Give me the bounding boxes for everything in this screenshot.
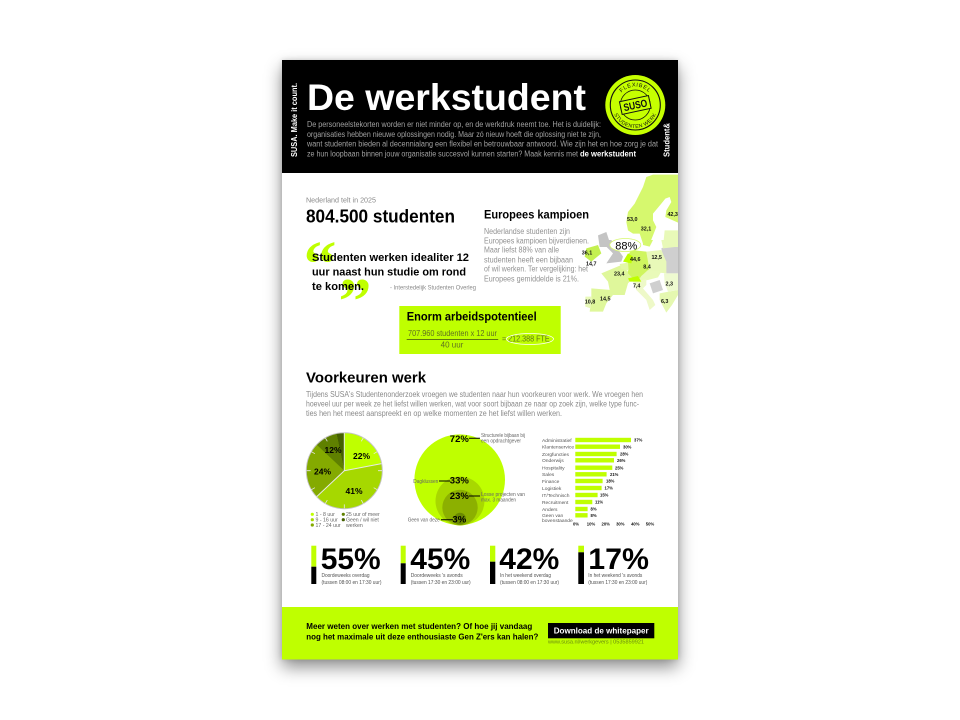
map values: 36,1 xyxy=(582,250,592,256)
panel heading: Enorm arbeidspotentieel xyxy=(407,311,537,324)
bar chart: Finance xyxy=(542,479,560,485)
stat: 55%: 55% xyxy=(321,543,381,576)
pie chart: 41% xyxy=(346,486,363,496)
venn chart: Dagklussen xyxy=(413,479,438,485)
stat: 42%: (tussen 08:00 en 17:30 uur) xyxy=(500,580,559,586)
header intro text: de werkstudent xyxy=(580,150,636,158)
map values: 42,3 xyxy=(667,212,678,218)
venn chart xyxy=(408,433,525,526)
venn chart: 33% xyxy=(450,475,469,486)
map values: 10,8 xyxy=(585,299,595,305)
formula: 40 uur xyxy=(441,341,464,350)
header intro text: ze hun loopbaan binnen jouw organisatie succesvol kunnen starten? Maak kennis met xyxy=(307,150,579,158)
bar chart: Administratief xyxy=(542,438,572,444)
venn chart: 3% xyxy=(452,515,467,526)
formula: 707.960 studenten x 12 uur xyxy=(408,329,497,338)
map values xyxy=(582,212,678,305)
quote text: te komen. xyxy=(312,281,364,293)
icon: stamp: FLEXIBEL xyxy=(619,82,650,92)
map values: 53,0 xyxy=(627,217,638,223)
stat: 55%: Doordeweeks overdag xyxy=(322,573,370,579)
venn chart: 23% xyxy=(450,491,469,502)
bar chart: 30% xyxy=(623,444,632,449)
header intro text: De personeelstekorten worden er niet minder op, en de werkdruk neemt toe. Het is duidelijk: xyxy=(307,120,601,129)
panel: Enorm arbeidspotentieel xyxy=(399,306,561,354)
section paragraph: ties hen het meest aanspreekt en op welke momenten ze het liefst willen werken. xyxy=(306,409,562,418)
section paragraph: hoeveel uur per week ze het liefst willen werken, wat voor soort bijbaan ze naar op zoek zijn, welke type func- xyxy=(306,400,639,408)
map values: 88% xyxy=(615,240,638,252)
bar chart xyxy=(542,438,654,526)
pie legend: 1 - 8 uur xyxy=(316,512,335,518)
bar chart: 11% xyxy=(595,500,603,505)
map values: 2,3 xyxy=(666,282,673,288)
map of Europe xyxy=(585,175,678,313)
vertical brand: Student& xyxy=(662,123,672,157)
stat: 17% xyxy=(578,543,649,586)
pie legend: werken xyxy=(346,523,363,529)
pie legend: 17 - 24 uur xyxy=(316,523,341,529)
bar chart: 40% xyxy=(631,522,640,526)
panel: Voorkeuren werk xyxy=(306,371,643,418)
vertical slogan: SUSA. Make it count. xyxy=(290,83,299,157)
bar chart: bovenstaande xyxy=(542,518,573,524)
stat: 55% xyxy=(311,543,382,586)
venn chart: een opdrachtgever xyxy=(481,438,521,444)
icon: stamp: STUDENTEN WERK xyxy=(614,113,656,128)
map values: 23,4 xyxy=(614,272,625,278)
call to action text: Meer weten over werken met studenten? Of hoe jij vandaag xyxy=(306,622,532,631)
stat: 42%: 42% xyxy=(499,543,559,576)
bar chart: IT/Technisch xyxy=(542,493,570,499)
stat: 17%: In het weekend 's avonds xyxy=(588,573,643,579)
quote text: uur naast hun studie om rond xyxy=(312,266,466,278)
bar chart: Klantenservice xyxy=(542,445,574,451)
map values: 44,6 xyxy=(630,257,641,263)
venn chart: 72% xyxy=(450,434,469,445)
stat: 55%: (tussen 08:00 en 17:30 uur) xyxy=(322,580,382,586)
panel: students count xyxy=(306,196,455,227)
download button: Download de whitepaper xyxy=(554,625,649,635)
bar chart: Hospitality xyxy=(542,466,565,472)
bar chart: 17% xyxy=(604,486,613,491)
stat: 45%: (tussen 17:30 en 23:00 uur) xyxy=(411,580,471,586)
section paragraph xyxy=(306,390,643,418)
panel: Europees kampioen text xyxy=(484,208,589,283)
stat: 45%: 45% xyxy=(410,543,470,576)
stat: 17%: (tussen 17:30 en 23:00 uur) xyxy=(588,580,647,586)
stat: 45%: Doordeweeks 's avonds xyxy=(411,573,463,579)
panel: call to action xyxy=(282,607,678,660)
pie chart: 22% xyxy=(353,451,370,461)
poster background xyxy=(282,60,678,659)
map values: 8,4 xyxy=(643,264,651,270)
paragraph: Europees gemiddelde is 21%. xyxy=(484,274,579,283)
icon: opening quote mark: “ xyxy=(304,228,336,301)
header intro text xyxy=(306,120,659,158)
download button xyxy=(548,623,654,638)
bar chart: 20% xyxy=(602,522,610,526)
call to action text xyxy=(306,622,538,641)
panel: header xyxy=(282,60,678,173)
bar chart: Logistiek xyxy=(542,486,562,492)
bar chart: 10% xyxy=(587,522,595,526)
formula xyxy=(407,329,550,350)
quote text xyxy=(312,252,469,293)
venn chart: Geen van deze xyxy=(408,518,440,524)
pie legend: Geen / wil niet xyxy=(346,518,379,524)
stat: 45% xyxy=(401,543,471,586)
bar chart: Anders xyxy=(542,507,558,513)
venn chart: Structurele bijbaan bij xyxy=(481,433,525,439)
quote text: Studenten werken idealiter 12 xyxy=(312,252,469,264)
stat: 42% xyxy=(490,543,559,586)
stat: 42%: In het weekend overdag xyxy=(500,573,551,579)
pie legend: 9 - 16 uur xyxy=(316,518,338,524)
bar chart: 26% xyxy=(617,458,626,463)
bar chart: Geen van xyxy=(542,513,563,519)
map values: 6,3 xyxy=(661,299,668,305)
bar chart: 8% xyxy=(590,507,597,512)
icon: stamp: SUSO xyxy=(622,97,648,114)
heading: Europees kampioen xyxy=(484,208,589,221)
quote xyxy=(304,228,476,338)
map values: 12,5 xyxy=(651,255,662,261)
map values: 7,4 xyxy=(633,284,640,290)
map values: 14,5 xyxy=(600,297,611,303)
pie chart: 12% xyxy=(324,445,342,455)
icon: stamp xyxy=(605,75,666,135)
section heading: Voorkeuren werk xyxy=(306,371,427,387)
bar chart: 18% xyxy=(606,479,615,484)
title: De werkstudent xyxy=(307,76,586,118)
bar chart: Zorgfuncties xyxy=(542,452,569,458)
icon: closing quote mark: ” xyxy=(338,266,372,338)
bar chart: 37% xyxy=(634,438,643,443)
bar chart: 8% xyxy=(590,513,597,518)
bar chart: 30% xyxy=(616,522,625,526)
bar chart: 50% xyxy=(646,522,654,526)
pie chart xyxy=(306,433,382,529)
section paragraph: Tijdens SUSA's Studentenonderzoek vroegen we studenten naar hun voorkeuren voor werk. We vroegen hen xyxy=(306,390,643,399)
formula: = 212.388 FTE xyxy=(502,335,550,344)
paragraph xyxy=(484,227,589,283)
paragraph: Nederlandse studenten zijn xyxy=(484,227,570,236)
map values: 14,7 xyxy=(586,262,597,268)
bar chart: 15% xyxy=(600,493,609,498)
paragraph: studenten heeft een bijbaan xyxy=(484,255,573,264)
paragraph: Europees kampioen bijverdienen. xyxy=(484,236,589,245)
quote source: - Interstedelijk Studenten Overleg xyxy=(390,284,476,291)
paragraph: of wil werken. Ter vergelijking: het xyxy=(484,265,589,274)
venn chart: Losse projecten van xyxy=(481,492,525,498)
contact line: www.susa.nl/werkgevers | 0535859921 xyxy=(547,640,644,646)
paragraph: Maar liefst 88% van alle xyxy=(484,246,559,255)
intro line: Nederland telt in 2025 xyxy=(306,196,376,204)
pie legend: 25 uur of meer xyxy=(346,512,380,518)
stat: 17%: 17% xyxy=(588,543,649,576)
highlight ellipse xyxy=(506,334,554,344)
big number: 804.500 studenten xyxy=(306,207,455,227)
header intro text: organisaties hebben nieuwe oplossingen nodig. Maar zó nieuw hoeft die oplossing niet te zijn, xyxy=(307,130,601,139)
bar chart: 25% xyxy=(615,465,624,470)
venn chart: max. 3 maanden xyxy=(481,498,516,504)
pie chart: 24% xyxy=(314,466,331,476)
map values: 32,1 xyxy=(641,226,651,232)
bar chart: 28% xyxy=(620,452,629,457)
bar chart: Recruitment xyxy=(542,500,569,506)
call to action text: nog het maximale uit deze enthousiaste Gen Z'ers kan halen? xyxy=(306,632,538,641)
bar chart: Sales xyxy=(542,472,555,478)
pie legend xyxy=(311,512,380,529)
bar chart: 21% xyxy=(610,472,619,477)
bar chart: Onderwijs xyxy=(542,458,564,464)
bar chart: 0% xyxy=(573,522,579,526)
header intro text: want studenten bieden al decennialang een flexibel en betrouwbaar antwoord. Wie zijn het en hoe zorg je dat xyxy=(306,140,659,148)
